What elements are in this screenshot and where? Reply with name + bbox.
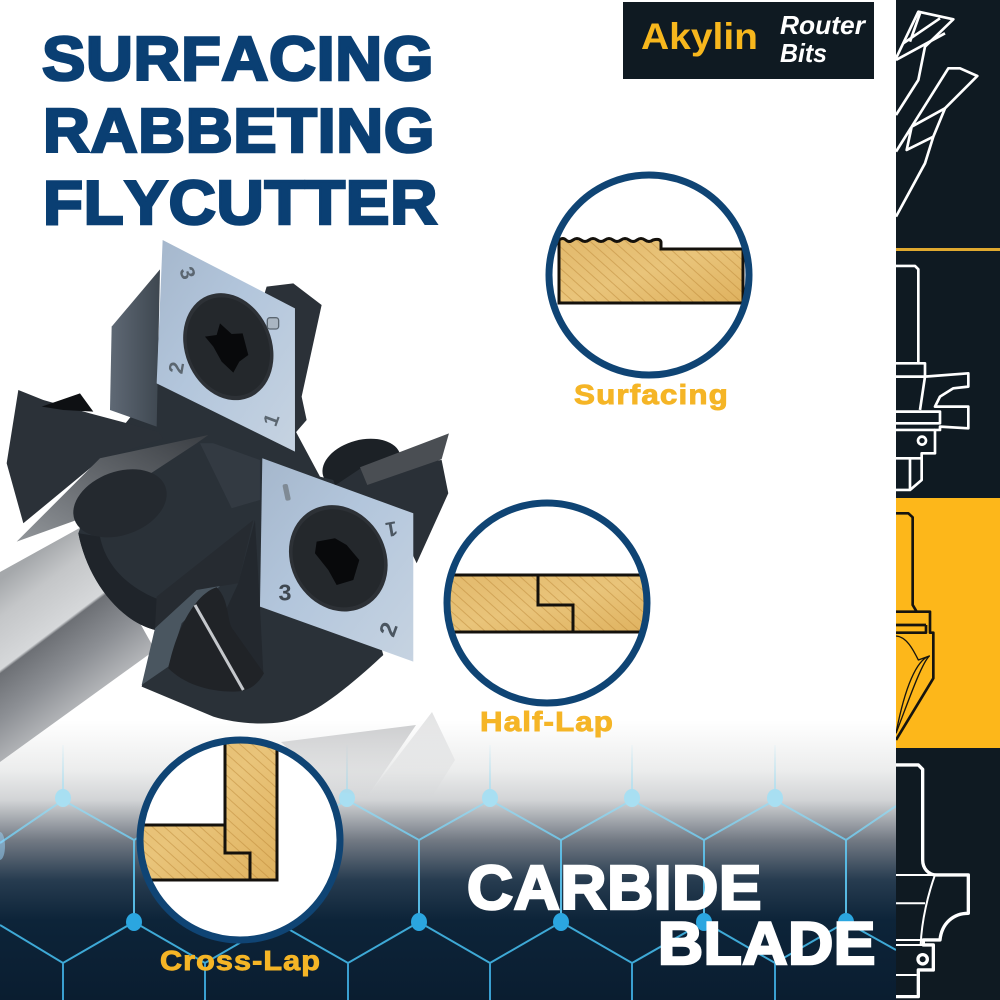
title: RABBETING <box>43 97 435 166</box>
half-lap circle <box>440 503 655 703</box>
lower carbide insert: 2 <box>374 619 403 640</box>
left edge glow <box>0 832 5 860</box>
brand logo: Akylin <box>641 16 758 57</box>
network nodes <box>55 789 854 931</box>
right knob <box>317 430 407 499</box>
lower carbide insert: 3 <box>278 580 291 606</box>
wood profile: cross-lap <box>144 744 278 882</box>
lower carbide insert <box>260 458 413 662</box>
flycutter product image <box>7 240 449 724</box>
icon: straight bits <box>896 12 977 217</box>
center rib <box>200 443 260 508</box>
left knob <box>64 457 176 550</box>
icon: rabbet bit <box>896 266 968 490</box>
upper carbide insert: 2 <box>165 360 189 375</box>
upper carbide insert: 3 <box>174 264 200 282</box>
right small blade <box>360 433 449 485</box>
title: SURFACING <box>42 25 434 94</box>
cutter back right wing <box>233 283 322 433</box>
cross-lap label: Cross-Lap <box>160 945 321 976</box>
left blade <box>17 435 208 542</box>
faint blade reflection <box>281 712 455 800</box>
panel: dark backgrounds <box>896 0 1000 1000</box>
brand logo: Bits <box>780 38 827 68</box>
carbide blade heading <box>467 854 876 977</box>
side block <box>110 269 160 427</box>
wood profile: half-lap <box>440 575 655 632</box>
cross-lap circle <box>130 735 340 940</box>
icon: chamfer bit on yellow <box>896 513 933 740</box>
lower carbide insert: 1 <box>384 516 399 541</box>
brand logo <box>623 2 874 79</box>
title <box>42 25 438 238</box>
hexagon network pattern <box>0 745 896 1000</box>
wood profile: surfacing <box>559 238 743 303</box>
upper carbide insert <box>157 240 295 452</box>
half-lap label: Half-Lap <box>480 706 614 737</box>
end face of body <box>78 533 160 630</box>
flute top band <box>155 520 253 628</box>
brand logo: Router <box>780 10 867 40</box>
router bit shank <box>0 525 155 762</box>
flute right wedge <box>217 520 263 673</box>
teeth marks <box>42 393 93 412</box>
surfacing circle <box>549 175 749 375</box>
right wing <box>333 460 448 563</box>
icon: roundover bit <box>896 765 968 997</box>
panel: highlighted yellow <box>896 498 1000 748</box>
main body <box>78 383 383 724</box>
right column of bit icons <box>896 0 1000 1000</box>
upper carbide insert: 1 <box>259 411 285 429</box>
carbide blade heading: CARBIDE <box>467 854 762 923</box>
gold divider <box>896 248 1000 251</box>
flute highlight <box>195 605 243 690</box>
surfacing label: Surfacing <box>574 379 729 410</box>
flute scoop <box>168 587 264 692</box>
title: FLYCUTTER <box>43 169 438 238</box>
carbide blade heading: BLADE <box>658 910 876 977</box>
left wing <box>7 390 163 523</box>
flute light face <box>142 586 220 685</box>
